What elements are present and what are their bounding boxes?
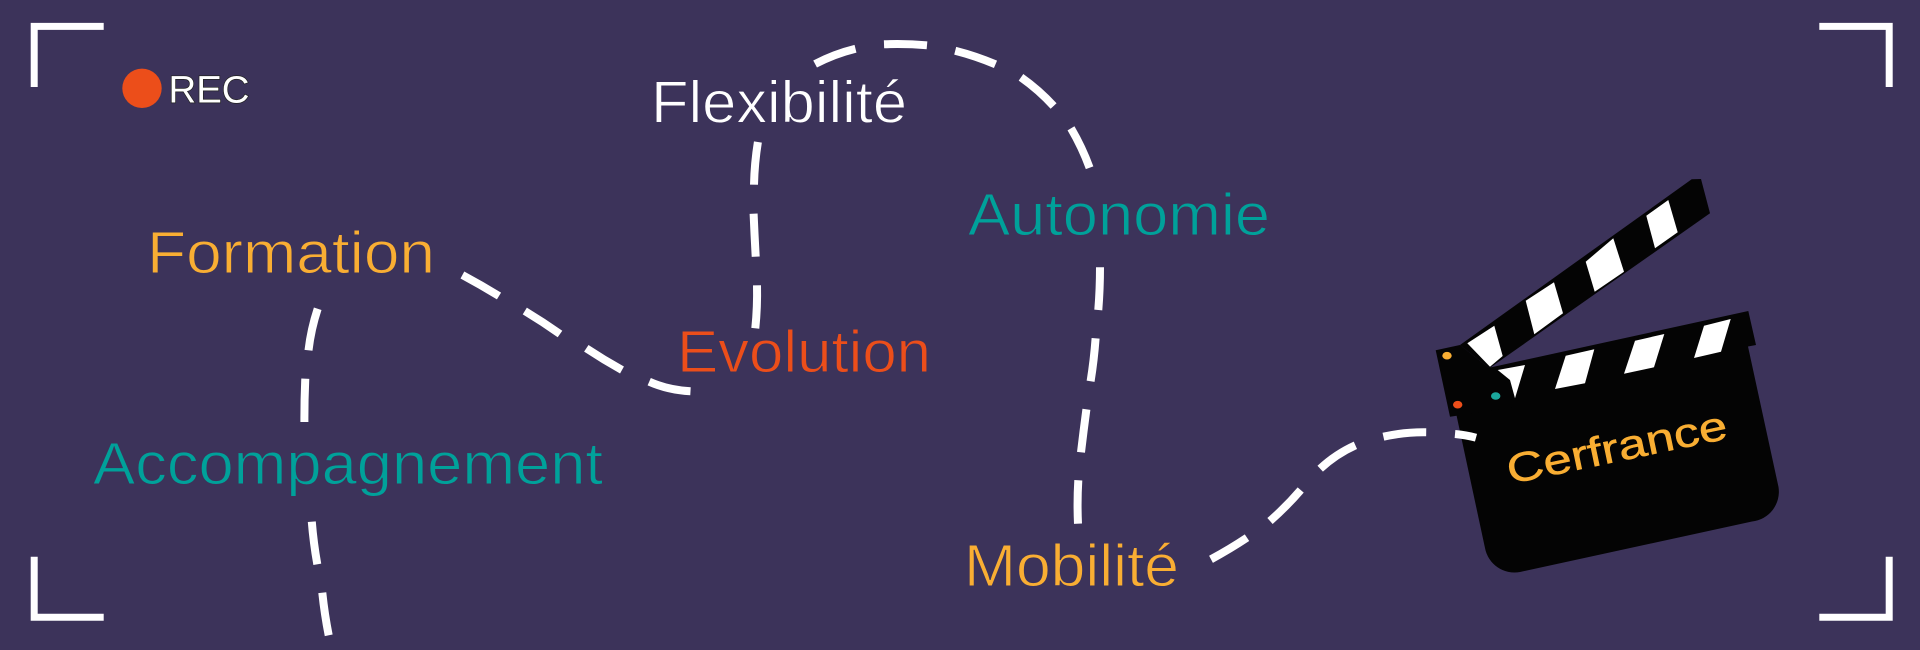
label: Formation: Formation [147, 220, 435, 286]
REC indicator [122, 69, 250, 112]
label: Accompagnement: Accompagnement [93, 431, 603, 497]
hinge dots [1442, 352, 1500, 409]
label: Mobilité: Mobilité [964, 533, 1179, 599]
hinge plate [1436, 345, 1515, 417]
lower clapper white stripes [1498, 319, 1731, 398]
dashed path: Autonomie to Mobilité [1078, 267, 1100, 524]
dashed path: bottom to Formation [304, 309, 329, 635]
clapperboard body [1450, 311, 1779, 573]
upper clapper white stripes [1467, 200, 1678, 367]
label: Autonomie: Autonomie [968, 182, 1270, 248]
label: Flexibilité: Flexibilité [651, 70, 907, 136]
dashed path: Formation to Evolution [462, 275, 690, 391]
upper clapper arm [1460, 179, 1710, 368]
dashed path: Mobilité to clapperboard [1211, 432, 1426, 559]
label: Evolution: Evolution [677, 319, 931, 385]
last dash over clapperboard [1455, 434, 1476, 438]
clapperboard label: Cerfrance: Cerfrance [1502, 402, 1731, 493]
REC indicator: REC [168, 70, 250, 112]
dashed path: Evolution to Flexibilité and over to Autonomie [754, 44, 1090, 328]
icon: clapperboard [1436, 179, 1779, 573]
